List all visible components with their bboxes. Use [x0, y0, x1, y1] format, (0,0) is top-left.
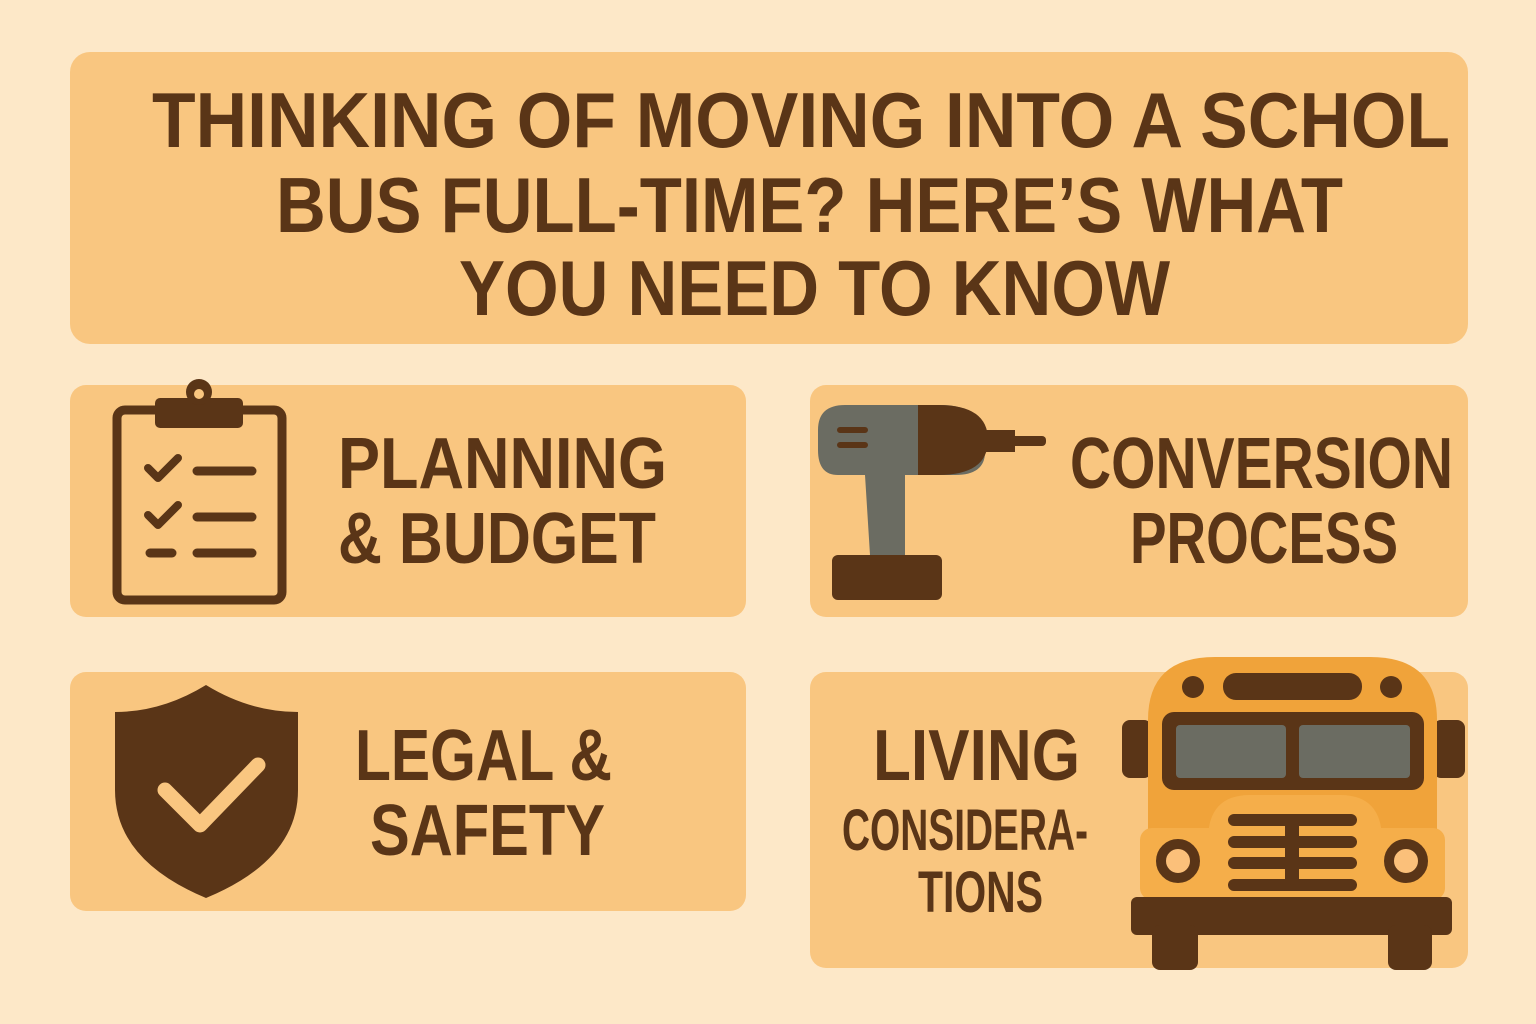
heading: conversion process	[1070, 424, 1453, 579]
heading: living considerations	[842, 716, 1088, 925]
icon: school bus	[1122, 657, 1465, 970]
panel: planning & budget	[70, 379, 746, 617]
title: YOU NEED TO KNOW	[459, 244, 1170, 332]
heading: conversion process: PROCESS	[1130, 499, 1398, 579]
heading: planning & budget	[338, 424, 667, 579]
icon: shield check	[115, 685, 298, 898]
heading: legal & safety: LEGAL &	[355, 716, 612, 796]
heading: living considerations: CONSIDERA-	[842, 798, 1088, 863]
title	[152, 76, 1450, 332]
heading: planning & budget: PLANNING	[338, 424, 667, 504]
icon: clipboard checklist	[117, 379, 282, 600]
title panel	[70, 52, 1468, 344]
panel: conversion process	[810, 385, 1468, 617]
heading: legal & safety	[355, 716, 612, 871]
heading: living considerations: LIVING	[873, 716, 1080, 796]
icon: drill	[818, 405, 1046, 600]
heading: planning & budget: & BUDGET	[338, 499, 656, 579]
title: THINKING OF MOVING INTO A SCHOL	[152, 76, 1450, 164]
panel: living considerations	[810, 657, 1468, 970]
heading: legal & safety: SAFETY	[370, 791, 605, 871]
heading: living considerations: TIONS	[918, 860, 1043, 925]
title: BUS FULL-TIME? HERE’S WHAT	[276, 161, 1343, 249]
panel: legal & safety	[70, 672, 746, 911]
